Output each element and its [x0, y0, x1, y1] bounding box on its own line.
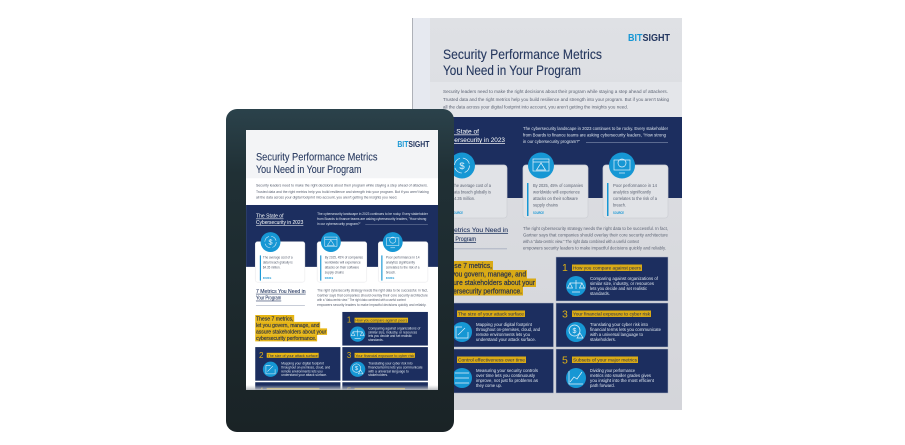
screen: stat card 2: SOURCE — [325, 277, 333, 280]
screen: stat card 3: Poor performance in 14 — [386, 255, 420, 259]
screen: title — [256, 152, 377, 176]
screen: metric 2: remote environments lets you — [281, 369, 323, 373]
paper: metric 3: Translating your cyber risk into — [590, 322, 649, 327]
paper: stat card 3: analytics significantly — [613, 190, 652, 194]
screen: stat card 1: SOURCE — [263, 277, 272, 280]
screen: highlighted statement: cybersecurity performance. — [256, 336, 317, 342]
paper: metric 1: 1 — [562, 262, 568, 274]
paper: strategy text — [523, 226, 668, 250]
screen: metric 2: 2 — [259, 351, 264, 360]
paper: metric 2: understand your attack surface. — [476, 337, 536, 342]
screen: title: Security Performance Metrics — [256, 152, 377, 164]
screen: stat card 3 — [378, 232, 428, 282]
paper: 7 metrics heading: Your Program — [443, 236, 476, 243]
paper: metric 3 — [556, 303, 668, 347]
panel: tablet screen — [246, 129, 439, 416]
screen: landscape text — [317, 212, 429, 226]
screen: metric 3: with a universal language to — [368, 369, 409, 373]
paper: metric 3: $ — [573, 328, 577, 335]
paper: metric 5: metrics into smaller grades gives — [590, 373, 651, 378]
screen: metric 3: stakeholders. — [368, 373, 388, 377]
screen: metric 4: 4 — [259, 386, 264, 395]
screen: highlighted statement — [255, 315, 327, 342]
paper: highlighted statement: cybersecurity performance. — [443, 286, 522, 296]
paper: stat card 1: data breach globally is — [452, 190, 492, 194]
paper: intro text: all the data across your digital footprint into account, you aren't getting the insights you need. — [443, 104, 628, 110]
paper: strategy text: empowers security leaders to make impactful decisions quickly and reliably. — [523, 246, 666, 250]
paper: metric 2: The size of your attack surface — [458, 312, 524, 317]
screen: stat card 3: correlates to the risk of a — [386, 265, 420, 269]
screen: stat card 1 — [255, 232, 305, 282]
paper: stat card 1: The average cost of a — [452, 183, 491, 188]
screen: intro text — [256, 184, 429, 199]
paper: landscape text: in our cybersecurity program?" — [523, 139, 581, 144]
paper: stat card 3 — [603, 152, 668, 218]
paper: metric 5: 5 — [562, 354, 568, 366]
screen: title: You Need in Your Program — [256, 164, 362, 176]
paper: metric 1 — [556, 257, 668, 301]
paper: metric 1: Comparing against organizations of — [590, 276, 659, 281]
screen: metric 1: standards. — [368, 338, 384, 342]
screen: 7 metrics heading — [256, 289, 306, 306]
screen: metric 1: lets you decide and set realistic — [368, 334, 412, 338]
paper: stat card 2: supply chains — [533, 202, 559, 208]
screen: navy band — [246, 205, 439, 267]
screen: stat card 2: By 2025, 45% of companies — [325, 255, 363, 259]
paper: stat card 1: $4.35 million. — [452, 196, 475, 201]
screen: metric 1: similar size, industry, or resources — [368, 330, 418, 334]
screen: stat card 2: attacks on their software — [325, 265, 359, 269]
screen: highlighted statement: assure stakeholders about your — [256, 329, 326, 335]
paper: metric 4: improve, not just fix problems as — [476, 378, 538, 383]
panel: tablet device — [226, 109, 454, 432]
screen: strategy text: with a "data-centric view." The right data combined with a useful context — [317, 298, 406, 302]
paper: intro text: Security leaders need to make the right decisions about their program while staying a step ahead of attackers. — [443, 89, 668, 94]
screen: 7 metrics heading: 7 Metrics You Need in — [256, 289, 306, 295]
screen: stat card 3: SOURCE — [386, 277, 395, 280]
screen: metric 5: 5 — [347, 386, 352, 395]
screen: stat card 1: $4.35 million. — [263, 265, 280, 269]
paper: metric 2: remote environments lets you — [476, 332, 531, 337]
screen: intro text: Trusted data and the right metrics help you build resilience and strength into your program. But if you aren't taking — [256, 190, 429, 194]
paper: highlighted statement — [442, 261, 536, 296]
screen: landscape text: from Boards to finance teams are asking cybersecurity leaders, "How strong — [317, 217, 427, 221]
paper: metric 4 — [442, 349, 554, 393]
paper: landscape text: The cybersecurity landscape in 2023 continues to be rocky. Every stakeholder — [523, 126, 669, 131]
screen: metric 3: Your financial exposure to cyber risk — [355, 354, 414, 358]
paper: stat card 1: $ — [459, 161, 465, 172]
screen: metric 3 — [342, 347, 428, 381]
paper: highlighted statement: let you govern, manage, and — [443, 270, 526, 278]
paper: metric 3: stakeholders. — [590, 337, 616, 342]
paper: title — [443, 46, 602, 78]
paper: state of cybersecurity heading: The State of — [443, 128, 479, 136]
paper: stat card 1 — [442, 152, 507, 218]
paper: stat card 2: worldwide will experience — [533, 190, 580, 194]
paper: strategy text: with a "data-centric view." The right data combined with a useful context — [523, 239, 640, 244]
paper: metric 5: Dividing your performance — [590, 368, 636, 373]
paper: stat card 2: By 2025, 45% of companies — [533, 183, 584, 188]
paper: metric 4: Control effectiveness over time — [458, 358, 525, 363]
paper: title: Security Performance Metrics — [443, 46, 602, 62]
paper: title: You Need in Your Program — [443, 62, 581, 78]
paper: stat card 3: SOURCE — [613, 211, 624, 215]
screen: metric 1: 1 — [347, 316, 352, 325]
paper: metric 2: Mapping your digital footprint — [476, 322, 533, 327]
paper: metric 3: 3 — [562, 308, 568, 320]
paper: metric 1: lets you decide and set realistic — [590, 286, 647, 291]
paper: state of cybersecurity heading: Cybersecurity in 2023 — [443, 137, 505, 144]
paper: stat card 3: correlates to the risk of a — [613, 196, 657, 201]
paper: 7 metrics heading — [443, 227, 508, 249]
screen: intro text: Security leaders need to make the right decisions about their program while staying a step ahead of attackers. — [256, 184, 428, 188]
paper: metric 2 — [442, 303, 554, 347]
screen: state of cybersecurity heading: Cybersecurity in 2023 — [256, 220, 303, 226]
paper: navy band — [413, 117, 682, 198]
paper: highlighted statement: These 7 metrics, — [443, 261, 492, 270]
screen: metric 5 — [342, 382, 428, 390]
paper: stat card 2 — [523, 152, 588, 218]
screen: landscape text: in our cybersecurity program?" — [317, 222, 361, 226]
paper: metric 2: throughout on-premises, cloud, and — [476, 327, 541, 332]
paper: stat card 1: SOURCE — [452, 211, 463, 215]
screen: state of cybersecurity heading — [256, 214, 303, 226]
paper: state of cybersecurity heading — [443, 128, 505, 144]
paper: logo: BITSIGHT — [628, 32, 670, 44]
paper: metric 1: similar size, industry, or resources — [590, 281, 654, 286]
screen: highlighted statement: let you govern, manage, and — [256, 323, 319, 329]
screen: metric 4 — [255, 382, 340, 390]
screen: stat card 3: analytics significantly — [386, 260, 415, 264]
screen: metric 1: Comparing against organizations of — [368, 327, 420, 331]
paper: landscape text — [523, 126, 669, 144]
screen: stat card 1: $ — [268, 238, 273, 247]
screen: metric 2: throughout on-premises, cloud, and — [281, 365, 330, 369]
paper: metric 5: path forward. — [590, 383, 615, 388]
paper: stat card 3: breach. — [613, 202, 626, 208]
paper: metric 3: with a universal language to — [590, 332, 644, 337]
screen: highlighted statement: These 7 metrics, — [256, 316, 294, 322]
screen: metric 3: $ — [355, 366, 358, 372]
paper: metric 4: 4 — [447, 354, 453, 366]
screen: metric 2: Mapping your digital footprint — [281, 362, 324, 366]
screen: 7 metrics heading: Your Program — [256, 296, 281, 302]
paper: metric 5: you insight into the most efficient — [590, 378, 655, 383]
paper: metric 4: Measuring your security controls — [476, 368, 538, 373]
paper: landscape text: from Boards to finance teams are asking cybersecurity leaders, "How strong — [523, 132, 667, 138]
paper: 7 metrics heading: 7 Metrics You Need in — [443, 227, 508, 234]
paper: metric 4: they come up. — [476, 383, 502, 388]
paper: strategy text: Gartner says that companies should overlay their core security architecture — [523, 232, 668, 238]
screen: metric 3: 3 — [347, 351, 352, 360]
screen: metric 3: Translating your cyber risk into — [368, 362, 413, 366]
screen: metric 2 — [255, 347, 340, 381]
screen: metric 1 — [342, 312, 428, 346]
paper: metric 1: How you compare against peers — [573, 266, 642, 271]
screen: stat card 2 — [317, 232, 367, 282]
screen: stat card 1: The average cost of a — [263, 255, 293, 259]
paper: highlighted statement: assure stakeholders about your — [443, 278, 535, 287]
paper: stat card 2: SOURCE — [533, 211, 544, 215]
paper: stat card 3: Poor performance in 14 — [613, 183, 657, 188]
screen: strategy text — [317, 288, 428, 307]
screen: stat card 3: breach. — [386, 270, 396, 274]
screen: metric 1: How you compare against peers — [355, 319, 408, 323]
paper: strategy text: The right cybersecurity strategy needs the right data to be successful. In fact, — [523, 226, 668, 231]
screen: state of cybersecurity heading: The State of — [256, 214, 284, 220]
paper: metric 2: 2 — [447, 308, 453, 320]
screen: strategy text: The right cybersecurity strategy needs the right data to be successful. In fact, — [317, 288, 428, 292]
paper: intro text: Trusted data and the right metrics help you build resilience and strength into your program. But if you aren't taking — [443, 97, 669, 102]
paper: metric 3: financial terms lets you communicate — [590, 327, 662, 332]
screen: metric 5: Subsets of your major metrics — [355, 389, 404, 393]
screen: stat card 2: supply chains — [325, 270, 344, 274]
screen: strategy text: empowers security leaders to make impactful decisions quickly and reliably. — [317, 303, 426, 307]
screen: metric 2: The size of your attack surface — [267, 354, 318, 358]
screen: stat card 2: worldwide will experience — [325, 260, 361, 264]
paper: metric 3: Your financial exposure to cyber risk — [573, 312, 651, 317]
screen: landscape text: The cybersecurity landscape in 2023 continues to be rocky. Every stakeholder — [317, 212, 429, 216]
screen: intro text: all the data across your digital footprint into account, you aren't getting the insights you need. — [256, 195, 397, 199]
screen: metric 4: Control effectiveness over time — [267, 389, 319, 393]
screen: logo: BITSIGHT — [397, 140, 430, 149]
screen: metric 2: understand your attack surface. — [281, 373, 327, 377]
paper: intro text — [443, 89, 669, 110]
paper: metric 4: over time lets you continuously — [476, 373, 536, 378]
screen: metric 3: financial terms lets you communicate — [368, 365, 423, 369]
screen: stat card 1: data breach globally is — [263, 260, 293, 264]
paper: stat card 2: attacks on their software — [533, 196, 578, 201]
paper: metric 1: standards. — [590, 291, 610, 296]
screen: strategy text: Gartner says that companies should overlay their core security architecture — [317, 293, 428, 297]
paper: metric 5 — [556, 349, 668, 393]
panel: printed report page — [412, 18, 682, 410]
paper: metric 5: Subsets of your major metrics — [573, 358, 638, 363]
